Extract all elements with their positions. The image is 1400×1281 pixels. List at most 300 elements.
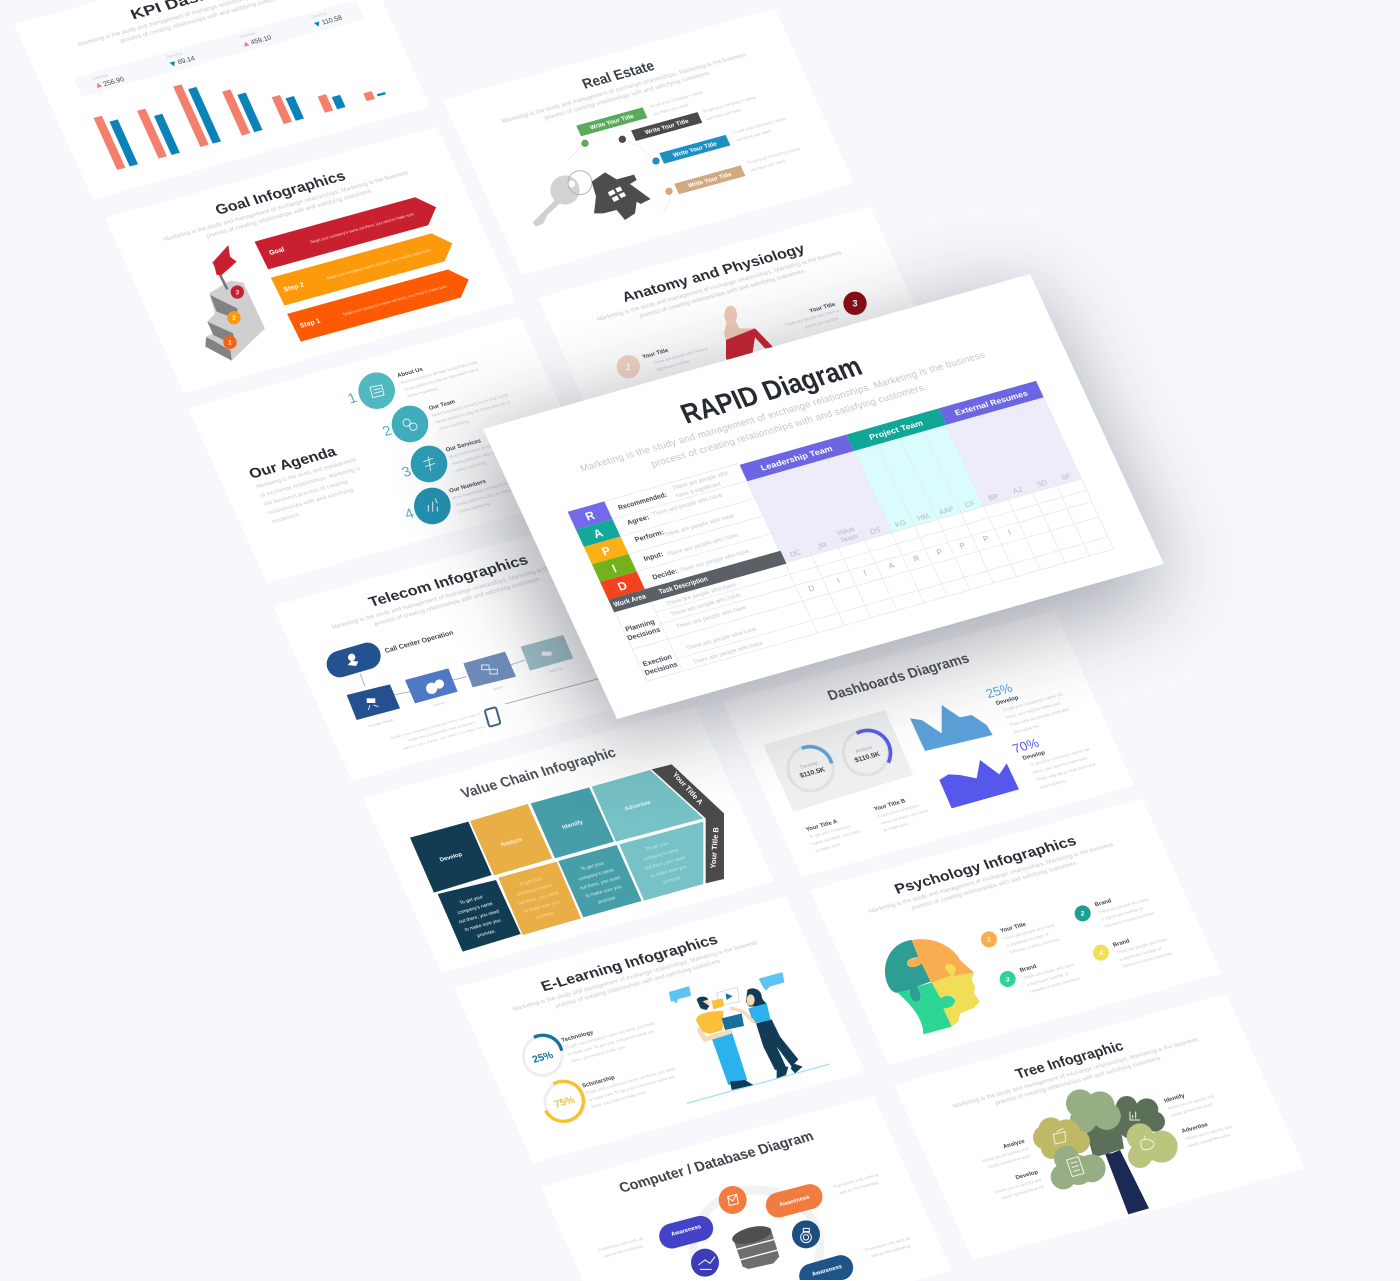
callout: title 1: Your Title — [642, 348, 670, 360]
item: technology: to make sure. To get your company's name out — [567, 1028, 655, 1057]
item: analyze: Analyze — [1002, 1139, 1027, 1150]
item: our numbers: online marketing. — [458, 501, 491, 514]
panel: E-Learning Infographics — [454, 896, 865, 1163]
body: analyze: To get your — [518, 876, 544, 888]
item: brand 3: followers in every business. — [1029, 976, 1081, 994]
your title B — [873, 794, 932, 833]
value chain labels: Advertise — [624, 800, 653, 813]
icon: staircase with flag: 3 — [235, 289, 239, 296]
stat: 70 percent: 70% — [1010, 735, 1042, 756]
item: advertise — [1181, 1116, 1236, 1148]
body: advertise: To get your — [645, 840, 670, 852]
team header: external — [939, 381, 1044, 425]
pill label: left: Awareness — [670, 1224, 702, 1238]
stat: 25 percent: Develop — [995, 695, 1020, 707]
stat: 256.90: Develop — [92, 72, 110, 81]
label: blue: Write Your Title — [672, 141, 719, 159]
title: RAPID Diagram — [676, 351, 867, 430]
item: brand 2: followers in every business. — [1104, 910, 1156, 929]
callout: title 3 — [781, 302, 843, 334]
role descriptions: There are people who have — [679, 549, 752, 574]
subtitle — [77, 0, 327, 55]
panel: Computer / Database Diagram — [541, 1096, 952, 1281]
lower row descriptions: There are people who have — [686, 626, 758, 652]
role rows: Decide: — [651, 567, 679, 582]
descriptions: To get your company's name — [746, 146, 801, 165]
arrow: goal: Goal — [268, 246, 286, 257]
title: Anatomy and Physiology — [620, 241, 808, 306]
title: Tree Infographic — [1013, 1039, 1126, 1082]
description: left — [597, 1236, 647, 1259]
item: develop: Allows you to quickly and — [994, 1177, 1043, 1194]
item: our numbers — [449, 468, 536, 514]
title: Computer / Database Diagram — [617, 1129, 816, 1196]
your title A: to make sure. — [815, 842, 842, 853]
body: identify: to make sure you — [585, 884, 623, 899]
label: dark — [631, 112, 702, 141]
item: analyze — [977, 1139, 1033, 1170]
node labels: Internet — [432, 701, 446, 708]
item: develop: easily spread the word. — [1001, 1184, 1045, 1200]
descriptions: To get your company's name — [649, 90, 704, 109]
role descriptions: have a significant — [675, 482, 722, 500]
side label B: Your Title B — [709, 826, 720, 869]
arrow: step 2 — [271, 229, 459, 306]
node labels: Provider Telkom — [368, 718, 394, 729]
body: identify: company's name — [578, 867, 615, 882]
column initials — [785, 464, 1073, 559]
arrow: step 2: Step 2 — [283, 282, 306, 294]
stat: 70 percent: there, you need to make sure. — [1032, 755, 1089, 775]
RAPID letter column — [568, 501, 645, 600]
subtitle: Marketing is the study and management of exchange relationships. Marketing is the business — [331, 558, 578, 631]
item: our team: Most businesses already know that social — [431, 392, 509, 418]
arrow: goal — [255, 193, 442, 270]
stat: 110.58: Develop — [310, 11, 328, 20]
item: identify: Allows you to quickly and — [1167, 1093, 1216, 1111]
item: brand 2 — [1094, 889, 1156, 929]
percent 25: 25% — [531, 1050, 555, 1066]
label: dark: Write Your Title — [644, 118, 691, 136]
panel: RAPID Diagram — [483, 274, 1164, 719]
item: your title: a significant number of — [1006, 932, 1050, 948]
column initials: AJ — [1011, 485, 1024, 496]
icon: badge and body figure — [617, 292, 867, 378]
icon: puzzle head and badges: 2 — [1081, 911, 1085, 918]
item: our services: online marketing. — [454, 460, 488, 473]
lower row descriptions: There are people who have — [692, 640, 765, 666]
panel: Anatomy and Physiology — [538, 206, 949, 473]
item: brand 2: There are people who have — [1097, 896, 1150, 915]
arrow: step 1: Step 1 — [299, 318, 322, 330]
gauges and area charts — [763, 705, 1019, 812]
item: our numbers: Our Numbers — [449, 479, 487, 494]
node labels — [366, 666, 566, 729]
item: our team: Our Team — [428, 399, 456, 412]
item: scholarship — [581, 1059, 683, 1109]
body: develop: to make sure you — [464, 918, 502, 933]
team header: project: Project Team — [868, 419, 925, 442]
decision letters: I — [862, 569, 868, 578]
numbers — [345, 385, 431, 524]
lower row labels: Planning — [624, 618, 656, 633]
body: identify: To get your — [580, 860, 606, 872]
body text — [256, 457, 374, 525]
item: technology — [561, 1014, 662, 1064]
item: advertise: Allows you to quickly and — [1184, 1124, 1233, 1141]
body: develop: company's name — [457, 901, 494, 916]
descriptions: To get your company's name — [702, 95, 757, 114]
value chain labels: Identify — [562, 820, 585, 831]
body: analyze: out there, you need — [517, 890, 560, 907]
callout: title 3: There are people who have a — [784, 308, 840, 327]
role descriptions: There are people who — [672, 470, 731, 492]
column tints — [747, 397, 1081, 563]
label: green — [576, 107, 647, 136]
subtitle: Marketing is the study and management of exchange relationships. Marketing is the business — [579, 350, 987, 474]
lower row labels: Decisions — [626, 626, 662, 642]
item: your title: Your Title — [999, 922, 1028, 934]
decision letters: P — [935, 547, 944, 557]
stat: 459.10: Develop — [239, 30, 257, 39]
callout: title 1: There are people who have a — [652, 346, 709, 365]
stat: 89.14: 89.14 — [177, 55, 196, 66]
your title A: Your Title A — [805, 819, 839, 833]
RAPID letter column: R — [583, 508, 597, 523]
label: blue — [659, 135, 730, 164]
body text: customers. — [271, 512, 302, 525]
team header: external: External Resumes — [953, 389, 1030, 418]
node labels: Server — [492, 685, 505, 691]
numbers: 4 — [402, 506, 417, 523]
column initials: BP — [987, 492, 1000, 503]
description: lower right: Promotions only work as — [864, 1235, 911, 1252]
progress rings — [523, 1035, 585, 1122]
body: advertise: out there, you need — [644, 855, 687, 872]
panel: Tree Infographic — [894, 994, 1305, 1260]
stat: 25 percent — [983, 668, 1074, 737]
team header: project — [846, 408, 946, 451]
description: top right — [833, 1172, 883, 1196]
body text: Marketing is the study and management — [256, 457, 358, 490]
column initials: Value — [835, 524, 856, 537]
callout: title 3: significant number — [804, 316, 840, 330]
illustration: two people — [670, 973, 830, 1103]
decision letters — [807, 528, 1012, 593]
title: Value Chain Infographic — [459, 745, 619, 802]
item: about us: media platforms play an important role in — [403, 367, 480, 392]
column initials: JR — [816, 540, 828, 551]
panel: Psychology Infographics — [810, 798, 1221, 1065]
item: brand 2: a significant number of — [1100, 906, 1145, 922]
value chain labels — [431, 798, 695, 942]
description: Target your company's name out there, you need to — [390, 712, 481, 740]
label: green: Write Your Title — [589, 113, 636, 131]
shadow behind RAPID panel — [465, 290, 1170, 745]
title: Psychology Infographics — [892, 833, 1079, 898]
item: advertise: easily spread the word. — [1187, 1132, 1232, 1148]
panel: Goal Infographics — [105, 126, 516, 393]
icon: badge and body figure: 1 — [626, 362, 631, 372]
title: Dashboards Diagrams — [825, 651, 972, 704]
decision letters: P — [982, 534, 990, 544]
pill label: bottom: Awareness — [811, 1264, 843, 1278]
body: develop — [450, 892, 508, 942]
role descriptions: There are people who have — [667, 533, 740, 558]
item: our services — [445, 427, 532, 473]
stat: 110.58 — [310, 7, 344, 29]
panel: KPI Dashboard — [14, 0, 430, 199]
RAPID letter column: I — [610, 562, 619, 575]
label: call center: Call Center Operation — [384, 630, 455, 655]
subtitle: Marketing is the study and management of exchange relationships. Marketing is the business — [512, 940, 759, 1013]
diagram: database hub — [672, 1186, 853, 1280]
decision letters: I — [835, 576, 841, 585]
item: brand 3: There are people who have — [1022, 962, 1075, 980]
numbers: 1 — [345, 390, 360, 407]
arrow: goal: Target your company's name out there, you need to make sure. — [309, 211, 416, 245]
item: brand 4: a significant number of — [1119, 946, 1163, 962]
role rows: Perform: — [634, 529, 665, 544]
column initials: KG — [893, 518, 908, 529]
item: brand 4: There are people who have — [1115, 937, 1168, 955]
item: identify: easily spread the word. — [1170, 1101, 1214, 1118]
lower row descriptions — [665, 582, 765, 666]
stat: 89.14: Develop — [166, 50, 184, 59]
role rows: Recommended: — [617, 491, 668, 512]
icons: agenda circles — [358, 372, 451, 524]
item: our team — [428, 385, 515, 431]
stat: 459.10 — [239, 27, 273, 48]
description — [390, 712, 487, 753]
RAPID letter column: P — [599, 544, 613, 558]
decision letters: R — [912, 554, 921, 563]
item: our services: Our Services — [445, 438, 482, 453]
item: about us — [397, 353, 484, 399]
title: Goal Infographics — [213, 169, 348, 219]
stat: 70 percent: That's why we provide point and — [1035, 761, 1097, 782]
item: your title: There are people who have — [1003, 922, 1056, 941]
subtitle: process of creating relationships with and satisfying customers. — [374, 576, 542, 628]
item: brand 4 — [1112, 929, 1175, 969]
title: Telecom Infographics — [366, 552, 531, 611]
item: develop — [991, 1170, 1046, 1201]
panel: Dashboards Diagrams — [723, 610, 1134, 877]
role descriptions: There are people who have — [652, 493, 724, 518]
item: our services: Most businesses already know that social — [448, 434, 526, 459]
body text: of exchange relationships. Marketing is — [259, 466, 362, 499]
panel: Our Agenda — [188, 316, 599, 583]
item: brand 3: a significant number of — [1025, 971, 1070, 987]
lower row descriptions: There are people who have — [670, 592, 743, 618]
item: our numbers: media platforms play an important role in — [455, 482, 532, 507]
item: brand 4: Brand — [1112, 938, 1131, 949]
panel: Value Chain Infographic — [363, 706, 774, 973]
body: analyze — [509, 873, 567, 924]
column initials: AAP — [937, 504, 955, 517]
icon: puzzle head and badges: 1 — [987, 937, 991, 944]
stat: 70 percent — [1010, 723, 1101, 792]
icon: puzzle head and badges: 3 — [1006, 976, 1010, 983]
icon: badge and body figure: 3 — [852, 299, 858, 309]
role rows — [617, 491, 701, 582]
subtitle: Marketing is the study and management of exchange relationships. Marketing is the business — [952, 1037, 1199, 1110]
RAPID letter column: A — [591, 526, 606, 541]
icon: staircase with flag: 2 — [232, 315, 236, 322]
arrow: step 1 — [287, 266, 475, 342]
descriptions: out there you need. — [705, 107, 743, 121]
column initials: Team — [838, 532, 859, 545]
panel: Telecom Infographics — [273, 514, 684, 781]
subtitle: Marketing is the study and management of exchange relationships. Marketing is the business — [596, 250, 843, 323]
body: develop: out there, you need — [458, 909, 501, 925]
item: identify: Identify — [1163, 1093, 1187, 1104]
column initials: SD — [1035, 478, 1049, 489]
body: analyze: to make sure you — [523, 899, 561, 915]
descriptions: To get your company's name — [732, 116, 787, 135]
numbers: 2 — [380, 423, 395, 440]
subtitle: process of creating relationships with and satisfying customers. — [544, 70, 712, 122]
your title B: Your Title B — [873, 799, 907, 813]
descriptions: out there you need. — [652, 102, 690, 116]
column initials: SF — [1060, 471, 1073, 482]
flow diagram — [340, 635, 600, 727]
gauge values: $110.5K — [799, 767, 826, 780]
node labels: VoIP Fax — [548, 666, 564, 674]
gauge values — [795, 744, 882, 780]
callout: title 3: Your Title — [809, 302, 837, 314]
numbers: 3 — [400, 464, 414, 481]
descriptions — [649, 72, 805, 190]
your title B: name out there, you need — [879, 808, 929, 826]
arrow: step 2: Target your company's name out there, you need to make sure. — [325, 247, 432, 281]
description: lower right — [864, 1235, 914, 1259]
item: your title — [999, 915, 1062, 955]
column initials: CF — [963, 498, 977, 509]
item: scholarship: To get your company's name out there, you need — [584, 1066, 676, 1095]
descriptions: out there you need. — [735, 128, 773, 142]
body: identify — [571, 858, 629, 908]
stat: 89.14 — [166, 48, 196, 68]
description: left: Promotions only work as — [597, 1236, 644, 1253]
role descriptions — [640, 470, 765, 575]
column initials: DC — [788, 548, 803, 559]
item: analyze: Allows you to quickly and — [981, 1146, 1030, 1163]
stat: 256.90 — [92, 69, 126, 90]
body: identify: out there, you need — [579, 875, 622, 891]
team header: leadership: Leadership Team — [759, 444, 834, 473]
body: develop: To get your — [459, 894, 485, 906]
lower row descriptions: There are people who have — [676, 605, 748, 630]
subtitle: process of creating relationships with and satisfying customers. — [555, 958, 723, 1010]
item: scholarship: there, you need to make sure. — [591, 1089, 648, 1109]
stat: 70 percent: To get your company's name out — [1029, 746, 1091, 767]
body: analyze: promote. — [536, 910, 556, 921]
subtitle: process of creating relationships with and satisfying customers. — [206, 188, 374, 240]
item: about us: online marketing. — [406, 386, 439, 399]
stat: 25 percent: 25% — [983, 680, 1015, 701]
title: Real Estate — [580, 59, 657, 93]
your title A: name out there, you need — [811, 828, 861, 846]
description: top right: well as the marketing. — [838, 1180, 880, 1195]
item: technology: To get your company's name out there, you need — [564, 1021, 656, 1050]
body text: the business process of creating — [263, 479, 349, 508]
descriptions: out there you need. — [749, 158, 787, 173]
subtitle: process of creating relationships with and satisfying customers. — [911, 860, 1079, 912]
body: advertise: company's name — [642, 847, 680, 862]
value chain labels: Develop — [439, 852, 464, 864]
item: develop: Develop — [1015, 1170, 1040, 1181]
item: technology: there, you need to make sure. — [570, 1044, 627, 1064]
subtitle: process of creating relationships with and satisfying customers. — [639, 268, 807, 320]
item: technology: Technology — [561, 1030, 595, 1044]
stat: 459.10: 459.10 — [250, 34, 273, 46]
gauge values: Analyze — [854, 745, 874, 755]
item: brand 3 — [1019, 954, 1081, 994]
icon: key and house keyring — [533, 136, 673, 227]
lower row labels: Exection — [642, 653, 673, 668]
role rows: Agree: — [626, 513, 651, 527]
dark header bar: Work Area — [612, 593, 647, 609]
item: about us: Most businesses already know that social — [400, 360, 478, 385]
item: our numbers: Most businesses already know that social — [452, 475, 530, 500]
decision letters: P — [958, 541, 967, 550]
item: advertise: Advertise — [1181, 1122, 1210, 1135]
subtitle: Marketing is the study and management of exchange relationships. Marketing is the business — [501, 52, 748, 125]
body: develop: promote. — [476, 929, 497, 939]
subtitle: process of creating relationships with and satisfying customers. — [995, 1055, 1163, 1107]
stat: 70 percent: click solutions. — [1039, 778, 1067, 790]
item: brand 3: Brand — [1019, 964, 1038, 974]
item: our services: media platforms play an important role in — [451, 441, 528, 466]
body: analyze: company's name — [516, 882, 554, 898]
subtitle: Marketing is the study and management of exchange relationships. Marketing is the business — [868, 842, 1115, 915]
value chain grid — [410, 764, 724, 952]
item: your title: followers in every business. — [1009, 936, 1061, 955]
value chain labels: Analyze — [500, 837, 524, 849]
body: advertise — [636, 838, 694, 888]
item: our team: online marketing. — [437, 418, 471, 431]
item: analyze: easily spread the word. — [988, 1153, 1032, 1169]
decision letters: I — [1007, 528, 1012, 537]
item: scholarship: Scholarship — [581, 1075, 617, 1089]
column initials: DS — [868, 525, 882, 536]
icon: puzzle head and badges — [885, 905, 1109, 1034]
bar chart — [90, 35, 387, 170]
callout: title 1 — [642, 338, 712, 374]
stat: 25 percent: To get your company's name out — [1002, 691, 1064, 712]
stat: 25 percent: click solutions. — [1012, 723, 1041, 735]
your title B: to make sure. — [883, 821, 910, 833]
lower row labels: Decisions — [643, 661, 679, 677]
dark header bar — [608, 551, 786, 612]
pill label: top: Awareness — [779, 1195, 811, 1208]
your title A: To get your company's — [808, 823, 852, 839]
your title A — [805, 814, 864, 853]
item: identify — [1163, 1086, 1219, 1118]
lower row labels — [622, 617, 679, 677]
role descriptions: There are people who have — [663, 513, 736, 539]
role rows: Input: — [642, 550, 665, 563]
panel: Real Estate — [443, 8, 854, 275]
description: left: well as the marketing. — [603, 1243, 645, 1259]
item: scholarship: to make sure. To get your company's name out — [588, 1074, 676, 1102]
label: tan — [674, 165, 745, 194]
dark header bar: Task Description — [658, 575, 709, 596]
title: Our Agenda — [247, 444, 340, 482]
team header: leadership — [740, 435, 854, 481]
item: our team: media platforms play an important role in — [434, 399, 511, 425]
